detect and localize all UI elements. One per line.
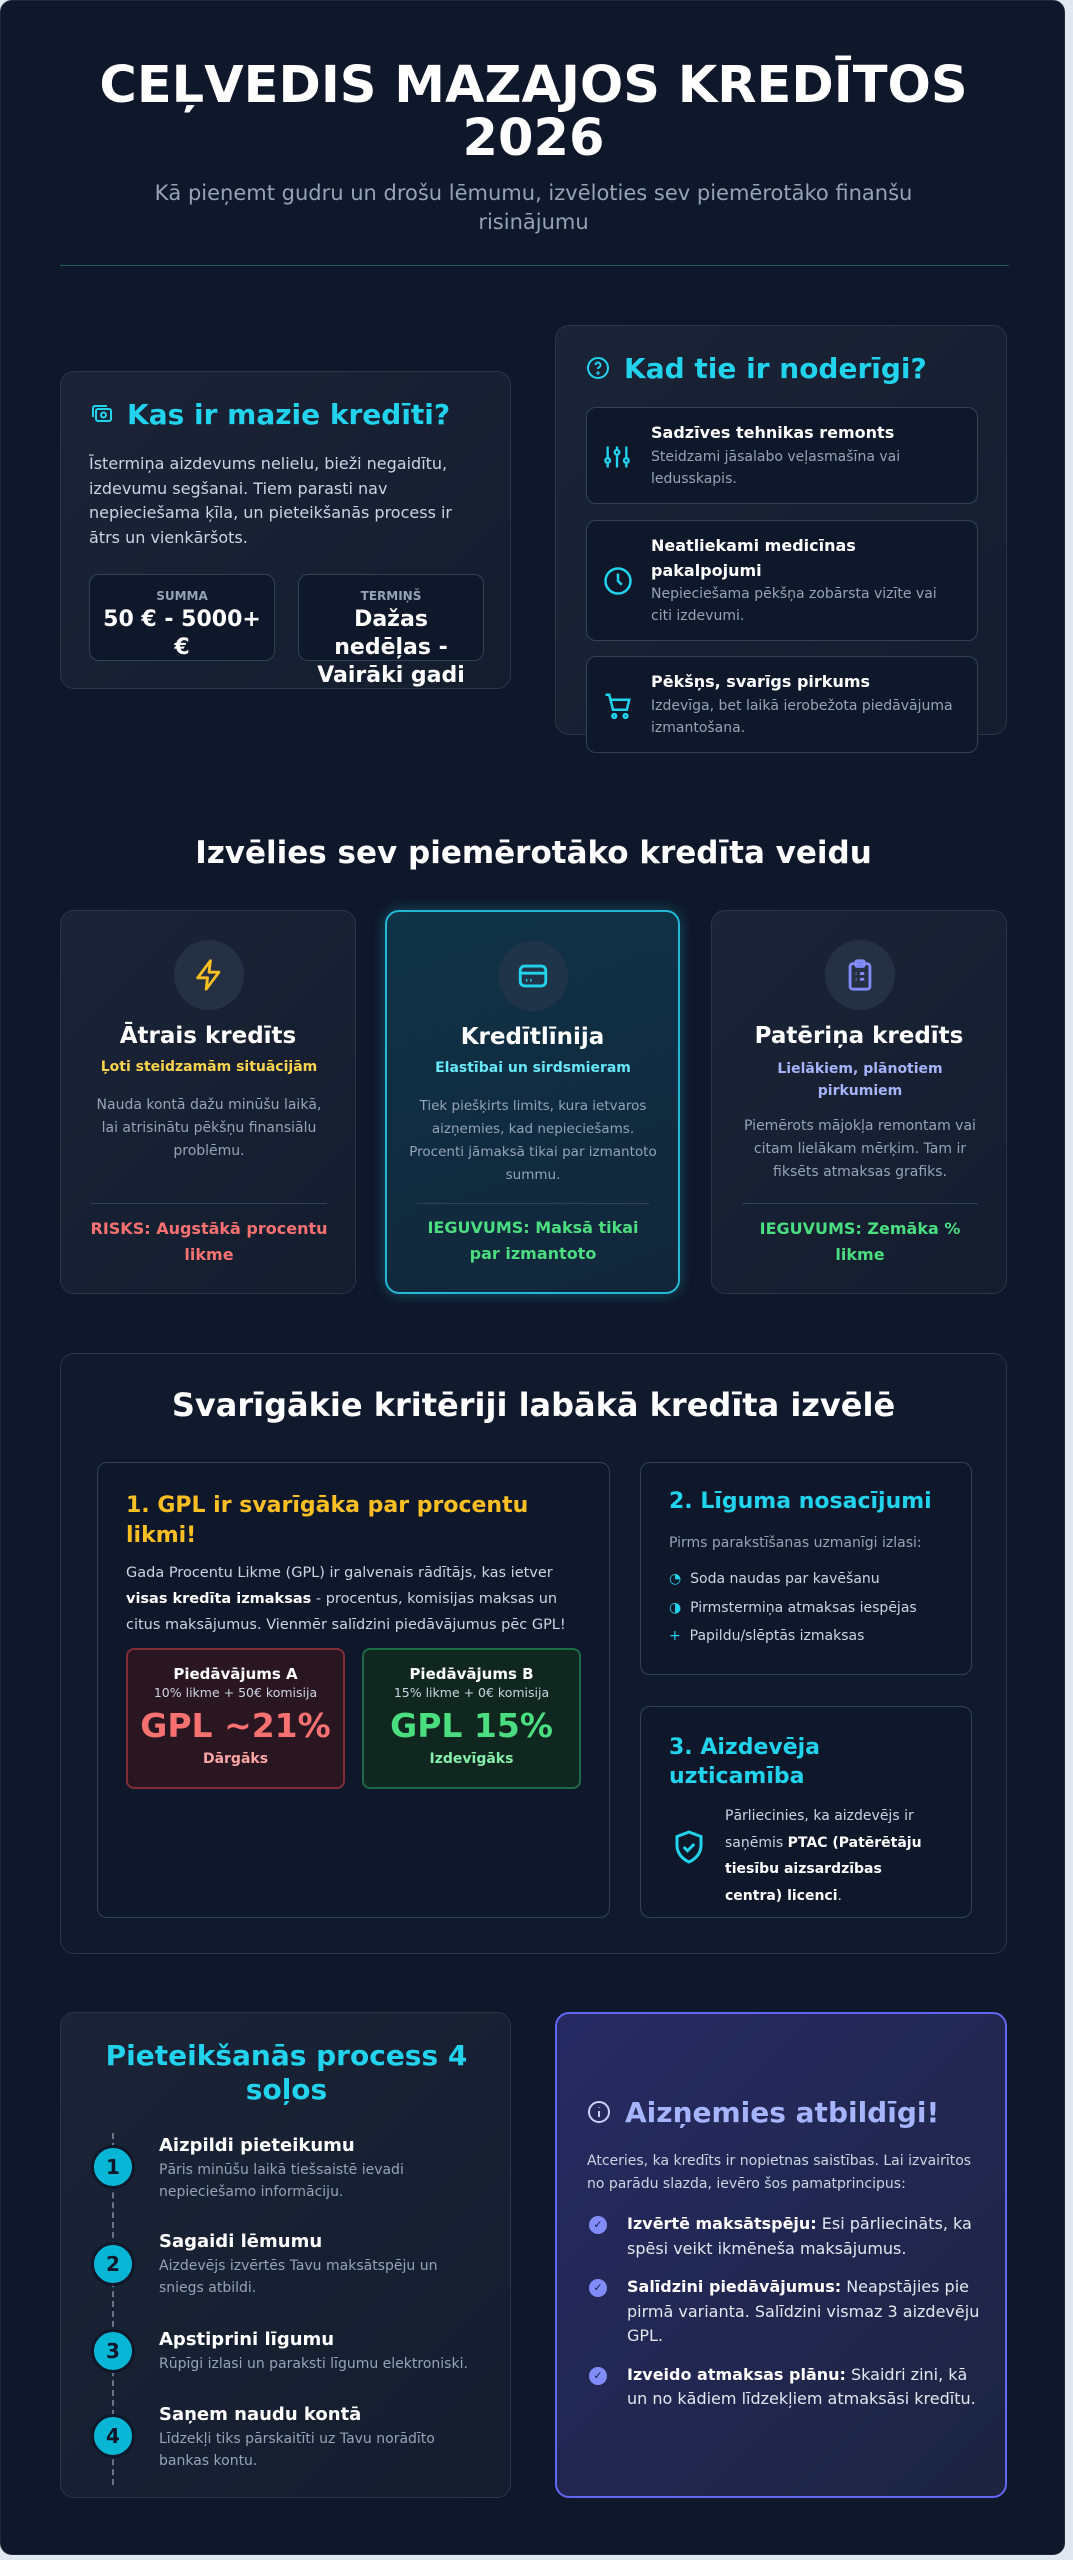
offer A [126, 1648, 345, 1789]
box: GPL: Gada Procentu Likme (GPL) ir galvenais rādītājs, kas ietver visas kredīta izmaksas - procentus, komisijas maksas un citus maksājumus. Vienmēr salīdzini piedāvājumus pēc GPL! [126, 1565, 566, 1633]
box: GPL: 1. GPL ir svarīgāka par procentu likmi! [126, 1493, 528, 1548]
step 2 [91, 2231, 437, 2296]
heading: Kad tie ir noderīgi? [624, 352, 927, 385]
box: GPL [97, 1462, 610, 1918]
card: fast credit [60, 910, 356, 1294]
box: lender trust: 3. Aizdevēja uzticamība [669, 1735, 820, 1789]
offer B: 15% likme + 0€ komisija [394, 1685, 549, 1700]
card: fast credit: Ātrais kredīts [120, 1023, 296, 1049]
card: fast credit: Nauda kontā dažu minūšu laikā, lai atrisinātu pēkšņu finansiālu problēmu. [97, 1097, 321, 1159]
step 2: Aizdevējs izvērtēs Tavu maksātspēju un sniegs atbildi. [159, 2258, 437, 2296]
card: credit line: Elastībai un sirdsmieram [435, 1060, 631, 1076]
step 3 [91, 2329, 468, 2373]
item: purchase: Pēkšņs, svarīgs pirkums [651, 672, 870, 691]
heading: Aizņemies atbildīgi! [625, 2096, 939, 2129]
offer A: 10% likme + 50€ komisija [154, 1685, 317, 1700]
list: Izveido atmaksas plānu: Skaidri zini, kā un no kādiem līdzekļiem atmaksāsi kredītu. [627, 2364, 976, 2408]
offer A: Piedāvājums A [173, 1665, 298, 1683]
stat: summa [89, 574, 275, 661]
card: fast credit: Ļoti steidzamām situācijām [101, 1059, 317, 1075]
offer A: GPL ~21% [140, 1706, 331, 1745]
stat: termins: TERMIŅŠ [361, 589, 421, 603]
item: appliance repair [586, 407, 978, 504]
box: contract terms: 2. Līguma nosacījumi [669, 1489, 932, 1514]
list [589, 2214, 979, 2408]
box: contract terms: ◑ Pirmstermiņa atmaksas iespējas [669, 1600, 917, 1616]
step 4: 4 [106, 2424, 120, 2448]
list: ✓ [593, 2281, 603, 2294]
stat: termins [298, 574, 484, 661]
step 2: 2 [106, 2252, 120, 2276]
step 4 [91, 2404, 435, 2469]
icon: clipboard [825, 940, 895, 1010]
step 1 [91, 2135, 404, 2200]
offer B: Piedāvājums B [409, 1665, 534, 1683]
step 1: Pāris minūšu laikā tiešsaistē ievadi nepieciešamo informāciju. [159, 2162, 404, 2200]
intro text: Atceries, ka kredīts ir nopietnas saistības. Lai izvairītos no parādu slazda, ievēro šos pamatprincipus: [587, 2153, 971, 2192]
panel: what are small credits [60, 371, 511, 689]
text block: Īstermiņa aizdevums nelielu, bieži negaidītu, izdevumu segšanai. Tiem parasti nav nepieciešama ķīla, un pieteikšanās process ir ātrs un vienkāršots. [89, 454, 452, 546]
icon: lightning [174, 940, 244, 1010]
title: CEĻVEDIS MAZAJOS KREDĪTOS 2026 [99, 56, 968, 168]
item: medical: Neatliekami medicīnas pakalpojumi [651, 536, 856, 580]
item: purchase: Izdevīga, bet laikā ierobežota piedāvājuma izmantošana. [651, 698, 953, 736]
offer B: GPL 15% [390, 1706, 553, 1745]
card: fast credit: RISKS: Augstākā procentu likme [90, 1219, 328, 1264]
box: contract terms: + Papildu/slēptās izmaksas [669, 1628, 864, 1644]
card: consumer credit: Patēriņa kredīts [755, 1023, 963, 1049]
step 4: Saņem naudu kontā [159, 2404, 361, 2425]
card: consumer credit: Piemērots mājokļa remontam vai citam lielākam mērķim. Tam ir fiksēts atmaksas grafiks. [744, 1118, 976, 1180]
card: credit line [385, 910, 680, 1294]
item: appliance repair: Steidzami jāsalabo veļasmašīna vai ledusskapis. [651, 449, 900, 487]
card: consumer credit: IEGUVUMS: Zemāka % likme [760, 1219, 960, 1264]
step 1: 1 [106, 2155, 120, 2179]
heading: Svarīgākie kritēriji labākā kredīta izvēlē [172, 1386, 895, 1424]
subtitle: Kā pieņemt gudru un drošu lēmumu, izvēloties sev piemērotāko finanšu risinājumu [155, 181, 912, 234]
stat: summa: SUMMA [156, 589, 208, 603]
section heading: credit types: Izvēlies sev piemērotāko kredīta veidu [195, 835, 872, 871]
item: medical [586, 520, 978, 641]
list: ✓ [593, 2218, 603, 2231]
step 1: Aizpildi pieteikumu [159, 2135, 355, 2156]
card: credit line: IEGUVUMS: Maksā tikai par izmantoto [427, 1218, 639, 1263]
list: ✓ [593, 2368, 603, 2382]
card: credit line: Kredītlīnija [461, 1024, 604, 1050]
card: consumer credit: Lielākiem, plānotiem pirkumiem [777, 1061, 943, 1099]
offer B [362, 1648, 581, 1789]
box: contract terms: Pirms parakstīšanas uzmanīgi izlasi: [669, 1535, 922, 1551]
stat: summa: 50 € - 5000+ € [103, 607, 261, 660]
card: credit line: Tiek piešķirts limits, kura ietvaros aizņemies, kad nepieciešams. Procenti jāmaksā tikai par izmantoto summu. [409, 1098, 657, 1183]
offer A: Dārgāks [203, 1751, 268, 1767]
offer B: Izdevīgāks [430, 1751, 513, 1767]
icon: card [498, 941, 568, 1011]
step 3: Rūpīgi izlasi un paraksti līgumu elektroniski. [159, 2356, 468, 2372]
card: consumer credit [711, 910, 1007, 1294]
panel: criteria [60, 1353, 1007, 1954]
box: lender trust: Pārliecinies, ka aizdevējs ir saņēmis PTAC (Patērētāju tiesību aizsardzības centra) licenci. [725, 1808, 922, 1904]
heading: Pieteikšanās process 4 soļos [106, 2039, 467, 2106]
item: purchase [586, 656, 978, 753]
box: contract terms [640, 1462, 972, 1675]
item: medical: Nepieciešama pēkšņa zobārsta vizīte vai citi izdevumi. [651, 586, 937, 624]
box: contract terms: ◔ Soda naudas par kavēšanu [669, 1571, 880, 1587]
step 3: Apstiprini līgumu [159, 2329, 334, 2350]
panel: application process [60, 2012, 511, 2498]
step 3: 3 [106, 2339, 120, 2363]
heading: Kas ir mazie kredīti? [127, 398, 450, 431]
box: lender trust [640, 1706, 972, 1918]
step 2: Sagaidi lēmumu [159, 2231, 322, 2252]
item: appliance repair: Sadzīves tehnikas remonts [651, 423, 894, 442]
list: Salīdzini piedāvājumus: Neapstājies pie pirmā varianta. Salīdzini vismaz 3 aizdevēju GPL. [627, 2277, 979, 2345]
step 4: Līdzekļi tiks pārskaitīti uz Tavu norādīto bankas kontu. [159, 2431, 435, 2469]
stat: termins: Dažas nedēļas - Vairāki gadi [317, 607, 465, 688]
panel: borrow responsibly [555, 2012, 1007, 2498]
list: Izvērtē maksātspēju: Esi pārliecināts, ka spēsi veikt ikmēneša maksājumus. [627, 2214, 972, 2258]
panel: when useful [555, 325, 1007, 735]
